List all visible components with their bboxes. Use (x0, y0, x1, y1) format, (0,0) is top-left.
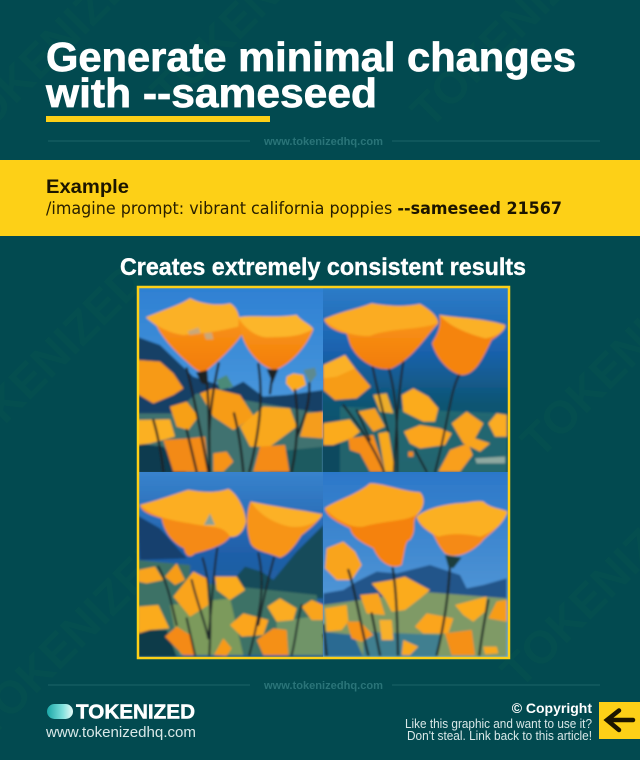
title underline (46, 116, 270, 122)
example prompt: /imagine prompt: vibrant california poppies --sameseed 21567 (46, 199, 562, 218)
icon: back arrow (599, 702, 640, 739)
logo mark (47, 704, 73, 719)
top site label: www.tokenizedhq.com (263, 136, 383, 148)
title: with --sameseed (45, 70, 377, 116)
image panel: poppy grid (130, 280, 520, 665)
bottom site label: www.tokenizedhq.com (263, 680, 383, 692)
poppy image top right (323, 288, 508, 472)
image heading: Creates extremely consistent results (120, 254, 526, 281)
logo wordmark: TOKENIZED (76, 700, 195, 724)
title (45, 34, 576, 116)
copyright notice: Don't steal. Link back to this article! (407, 728, 592, 743)
copyright notice: © Copyright (512, 700, 592, 716)
poppy image bottom left (139, 472, 323, 657)
footer logo (45, 700, 196, 741)
copyright notice: Like this graphic and want to use it? (405, 716, 592, 731)
image frame (138, 287, 509, 658)
copyright notice (405, 700, 592, 743)
poppy image bottom right (323, 472, 508, 657)
poppy image top left (139, 288, 323, 472)
title: Generate minimal changes (46, 34, 576, 80)
website: www.tokenizedhq.com (45, 724, 196, 741)
panel: example band (0, 160, 640, 236)
example heading: Example (46, 177, 129, 198)
